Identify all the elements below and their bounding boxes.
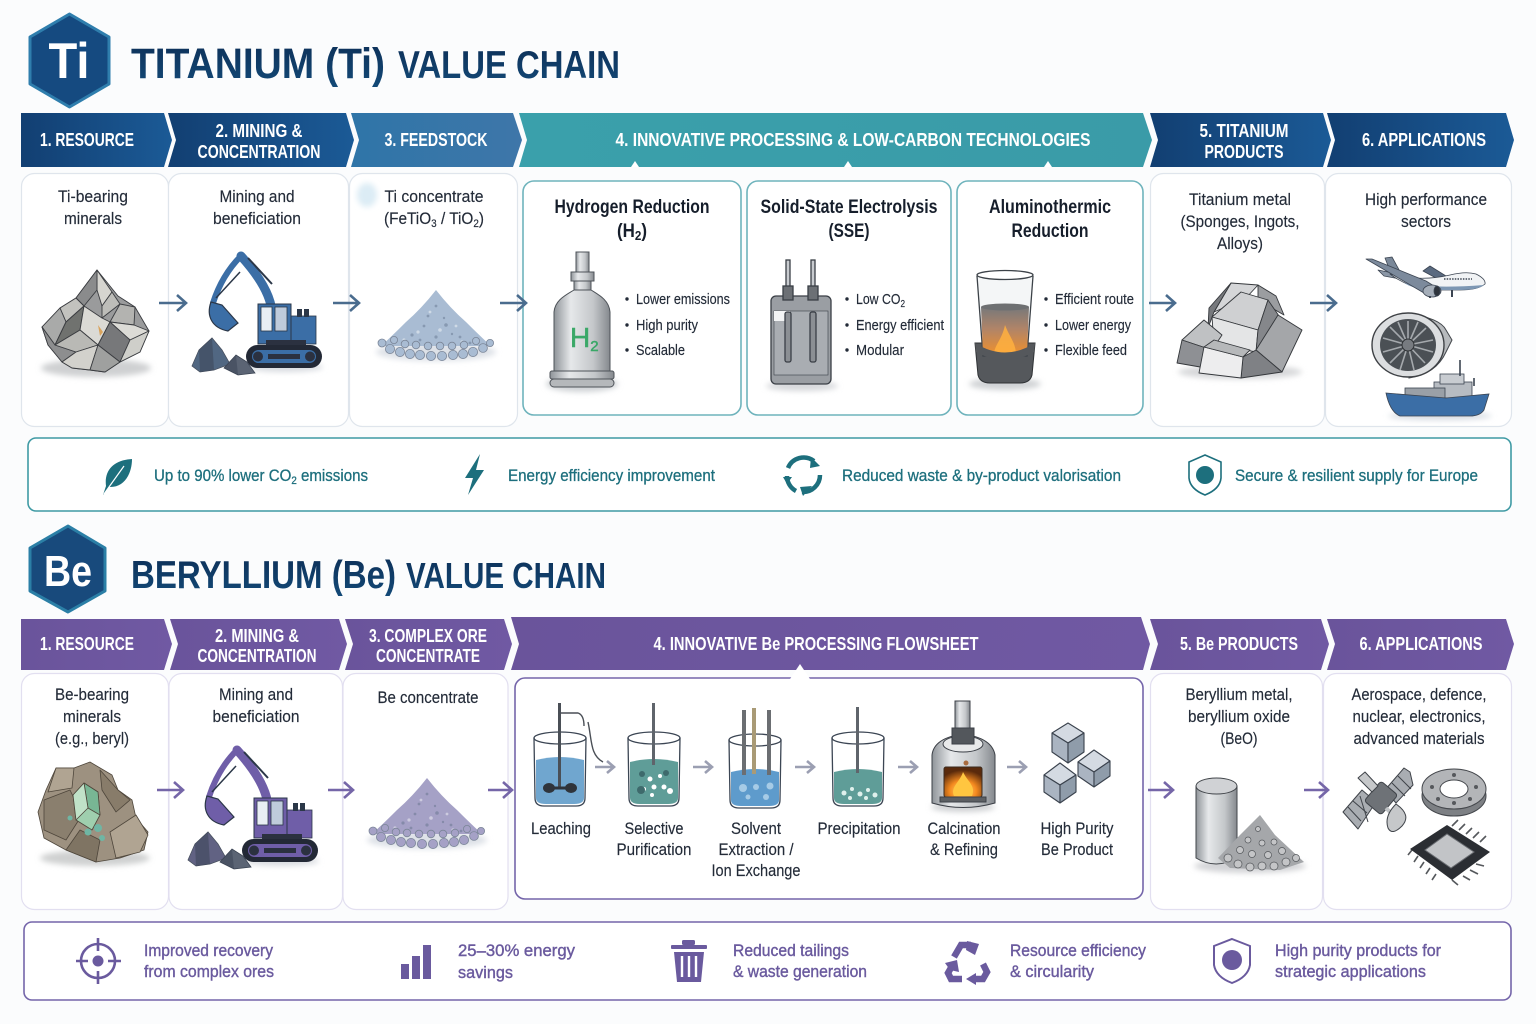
panel: Ti mining card: Mining and <box>220 187 294 206</box>
icon: titanium ingots <box>1177 283 1302 379</box>
icon: titanium concentrate pile <box>376 290 496 361</box>
list: aluminothermic benefits <box>1044 291 1134 359</box>
chevron: 3 feedstock: 3. FEEDSTOCK <box>384 130 488 150</box>
list: hydrogen benefits: Lower emissions <box>636 291 730 308</box>
icon: ship <box>1386 360 1492 420</box>
step: solvent extraction: Solvent <box>731 819 781 838</box>
panel: aluminothermic reduction: Reduction <box>1012 221 1088 242</box>
arrow: step 5 to 6 <box>1007 761 1026 773</box>
chevron: 4 flowsheet <box>511 617 1150 670</box>
icon: Ti hexagon badge: Ti <box>48 33 90 89</box>
list: aluminothermic benefits: Flexible feed <box>1055 342 1127 359</box>
panel: Be applications card: Aerospace, defence, <box>1352 685 1486 704</box>
panel: titanium products card: Alloys) <box>1217 234 1263 253</box>
icon: titanium mineral rock <box>41 270 151 377</box>
icon: hydrogen cylinder: 2 <box>590 338 599 355</box>
arrow: Ti feedstock to processing <box>500 295 526 311</box>
panel: solid-state electrolysis: (SSE) <box>828 221 870 242</box>
arrow: Ti processing to products <box>1149 295 1175 311</box>
panel: Be products card: (BeO) <box>1220 729 1258 748</box>
benefit: reduced waste: Reduced waste & by-product valorisation <box>842 466 1121 485</box>
step: solvent extraction: Extraction / <box>718 840 794 859</box>
icon: metal flange <box>1422 769 1486 816</box>
step: selective purification: Purification <box>616 840 692 859</box>
chevron: 6 applications: 6. APPLICATIONS <box>1360 634 1482 654</box>
panel: Ti feedstock card: (FeTiO <box>384 209 436 228</box>
icon: beryllium rod and powder <box>1194 778 1306 873</box>
icon: jet turbine <box>1372 313 1452 378</box>
chevron: 2 mining <box>168 113 354 167</box>
panel: titanium applications card <box>1326 174 1512 426</box>
chevron: 2 mining: CONCENTRATION <box>198 646 316 666</box>
step: leaching <box>531 703 603 838</box>
panel: Be resource card: minerals <box>63 707 121 726</box>
panel: Ti feedstock card <box>350 174 518 426</box>
panel: hydrogen reduction: ) <box>641 221 647 242</box>
panel: Be products card: Beryllium metal, <box>1186 685 1292 704</box>
panel: solid-state electrolysis: Solid-State Electrolysis <box>760 197 938 218</box>
benefit: energy savings: savings <box>458 963 513 982</box>
panel: aluminothermic reduction: Aluminothermic <box>989 197 1111 218</box>
chevron: 5 titanium products <box>1150 113 1331 167</box>
icon: blue excavator <box>192 256 323 375</box>
icon: beryl ore <box>38 762 150 866</box>
step: calcination and refining: & Refining <box>930 840 998 859</box>
chevron: 6 applications: 6. APPLICATIONS <box>1362 130 1486 150</box>
benefit: resource efficiency: & circularity <box>1010 962 1094 981</box>
panel: hydrogen reduction: (H <box>617 221 637 242</box>
icon: Be hexagon badge: Be <box>44 547 92 596</box>
step: leaching: Leaching <box>531 819 591 838</box>
list: hydrogen benefits: Scalable <box>636 342 685 359</box>
arrow: Be resource to mining <box>157 782 183 798</box>
title: titanium value chain <box>131 40 620 88</box>
icon: electrolysis cell <box>766 260 838 391</box>
arrow: Be flowsheet to products <box>1148 782 1173 798</box>
icon: beryllium concentrate pile <box>367 778 487 849</box>
step: calcination and refining <box>928 701 1000 859</box>
step: solvent extraction <box>712 708 800 880</box>
benefit: reduced tailings: & waste generation <box>733 962 867 981</box>
icon: hydrogen cylinder <box>546 252 618 392</box>
benefit: lower CO2 emissions: emissions <box>297 466 368 485</box>
step: selective purification <box>616 703 692 859</box>
panel: titanium applications card: High performance <box>1365 190 1487 209</box>
chevron: 3 complex ore: CONCENTRATE <box>376 646 480 666</box>
panel: Ti mining card <box>168 174 348 426</box>
benefit: improved recovery: Improved recovery <box>144 941 273 960</box>
icon: Ti hexagon badge <box>30 14 109 107</box>
panel: Be products card: beryllium oxide <box>1188 707 1290 726</box>
panel: Ti resource card <box>22 174 168 426</box>
panel: titanium products card: (Sponges, Ingots, <box>1180 212 1300 231</box>
chevron: 2 mining: 2. MINING & <box>216 121 302 141</box>
chevron: 2 mining: CONCENTRATION <box>198 142 320 162</box>
benefit: high purity: High purity products for <box>1275 941 1441 960</box>
title: beryllium value chain: VALUE CHAIN <box>406 555 606 596</box>
benefit: energy efficiency: Energy efficiency improvement <box>508 466 715 485</box>
title: titanium value chain: TITANIUM (Ti) <box>131 40 385 88</box>
step: precipitation: Precipitation <box>818 819 900 838</box>
panel: Be resource card: (e.g., beryl) <box>55 729 129 748</box>
list: electrolysis benefits: 2 <box>900 299 905 310</box>
arrow: Be products to applications <box>1304 782 1328 798</box>
title: beryllium value chain <box>131 554 606 597</box>
benefit: energy savings: 25–30% energy <box>458 941 575 960</box>
panel: hydrogen reduction <box>523 181 741 415</box>
benefit: reduced waste <box>783 457 1121 496</box>
icon: Be hexagon badge <box>30 526 105 612</box>
list: electrolysis benefits: Modular <box>856 342 904 359</box>
benefit: lower CO2 emissions: 2 <box>291 475 297 487</box>
panel: Ti feedstock card: Ti concentrate <box>384 187 484 206</box>
title: beryllium value chain: BERYLLIUM (Be) <box>131 554 396 597</box>
panel: titanium products card <box>1150 174 1324 426</box>
icon: purple excavator <box>188 750 319 869</box>
panel: Ti mining card: beneficiation <box>213 209 301 228</box>
list: electrolysis benefits: Energy efficient <box>856 317 945 334</box>
panel: Be concentrate card <box>343 674 508 910</box>
benefit: lower CO2 emissions <box>103 459 368 495</box>
list: aluminothermic benefits: Efficient route <box>1055 291 1134 308</box>
chevron: 5 be products: 5. Be PRODUCTS <box>1180 634 1298 654</box>
chevron: 3 complex ore <box>345 619 512 670</box>
panel: Be benefits bar <box>24 922 1511 1000</box>
panel: hydrogen reduction: Hydrogen Reduction <box>554 197 710 218</box>
benefit: reduced tailings <box>671 940 867 982</box>
list: hydrogen benefits <box>625 291 730 359</box>
arrow: Ti resource to mining <box>159 295 186 311</box>
panel: Be concentrate card: Be concentrate <box>378 688 478 707</box>
panel: Ti resource card: Ti-bearing <box>58 187 128 206</box>
panel: Be applications card: nuclear, electronics, <box>1352 707 1486 726</box>
step: selective purification: Selective <box>624 819 684 838</box>
panel: Ti resource card: minerals <box>64 209 122 228</box>
step: calcination and refining: Calcination <box>928 819 1000 838</box>
benefit: improved recovery <box>76 938 274 984</box>
chevron: 1 resource <box>21 619 172 670</box>
panel: Be processing flowsheet <box>515 664 1143 899</box>
chevron: 4 flowsheet: 4. INNOVATIVE Be PROCESSING FLOWSHEET <box>654 634 978 654</box>
section: titanium header <box>30 14 620 107</box>
step: high purity be product <box>1040 723 1114 859</box>
section: beryllium header <box>30 526 606 612</box>
chevron: 6 applications <box>1327 113 1514 167</box>
chevron: 4 innovative processing <box>519 113 1152 167</box>
panel: Ti feedstock card: / TiO <box>437 209 473 228</box>
panel: Ti feedstock card: 2 <box>473 218 479 230</box>
chevron: 3 feedstock <box>351 113 522 167</box>
chevron: 3 complex ore: 3. COMPLEX ORE <box>369 626 487 646</box>
panel: Ti feedstock card: ) <box>479 209 484 228</box>
panel: Be mining card <box>169 674 342 910</box>
chevron: 2 mining: 2. MINING & <box>215 626 299 646</box>
panel: aluminothermic reduction <box>957 181 1143 415</box>
icon: hydrogen cylinder: H <box>570 322 590 353</box>
icon: airplane <box>1366 257 1485 298</box>
panel: Be applications card: advanced materials <box>1354 729 1484 748</box>
panel: hydrogen reduction: 2 <box>635 228 641 243</box>
step: high purity be product: Be Product <box>1041 840 1113 859</box>
panel: Ti feedstock card: 3 <box>431 218 437 230</box>
step: precipitation <box>818 707 900 838</box>
benefit: resource efficiency: Resource efficiency <box>1010 941 1146 960</box>
chevron: 4 innovative processing: 4. INNOVATIVE PROCESSING & LOW-CARBON TECHNOLOGIES <box>616 130 1090 150</box>
list: hydrogen benefits: High purity <box>636 317 698 334</box>
panel: Be mining card: beneficiation <box>212 707 300 726</box>
icon: crucible with melt <box>969 270 1041 390</box>
section: titanium stage chevrons <box>21 113 1514 167</box>
chevron: 2 mining <box>170 619 347 670</box>
panel: titanium products card: Titanium metal <box>1189 190 1291 209</box>
benefit: secure supply: Secure & resilient supply for Europe <box>1235 466 1478 485</box>
panel: Be resource card: Be-bearing <box>55 685 129 704</box>
arrow: step 1 to 2 <box>595 761 614 773</box>
arrow: Be concentrate to flowsheet <box>488 782 512 798</box>
step: high purity be product: High Purity <box>1040 819 1114 838</box>
benefit: improved recovery: from complex ores <box>144 962 274 981</box>
chevron: 5 titanium products: PRODUCTS <box>1204 142 1284 162</box>
chevron: 1 resource: 1. RESOURCE <box>40 130 134 150</box>
title: titanium value chain: VALUE CHAIN <box>398 44 620 87</box>
panel: Ti benefits bar <box>28 438 1511 511</box>
panel: Be applications card <box>1324 674 1512 910</box>
benefit: high purity: strategic applications <box>1275 962 1426 981</box>
benefit: reduced tailings: Reduced tailings <box>733 941 849 960</box>
chevron: 1 resource: 1. RESOURCE <box>40 634 134 654</box>
icon: microchip <box>1408 820 1490 885</box>
arrow: step 2 to 3 <box>693 761 712 773</box>
chevron: 1 resource <box>21 113 172 167</box>
panel: Be mining card: Mining and <box>219 685 293 704</box>
icon: satellite <box>1343 768 1413 832</box>
panel: solid-state electrolysis <box>747 181 951 415</box>
benefit: high purity <box>1214 939 1441 983</box>
list: electrolysis benefits: Low CO <box>856 291 910 308</box>
chevron: 5 titanium products: 5. TITANIUM <box>1200 121 1288 141</box>
panel: Be resource card <box>22 674 168 910</box>
step: solvent extraction: Ion Exchange <box>712 861 800 880</box>
benefit: energy savings <box>401 941 575 982</box>
arrow: Ti mining to feedstock <box>333 295 359 311</box>
benefit: secure supply <box>1189 455 1478 495</box>
panel: titanium applications card: sectors <box>1401 212 1451 231</box>
arrow: step 3 to 4 <box>795 761 814 773</box>
panel: Be products card <box>1150 674 1322 910</box>
arrow: Ti products to applications <box>1310 295 1336 311</box>
chevron: 6 applications <box>1327 619 1514 670</box>
benefit: resource efficiency <box>945 941 1146 985</box>
arrow: step 4 to 5 <box>898 761 917 773</box>
arrow: Be mining to concentrate <box>328 782 353 798</box>
chevron: 5 be products <box>1150 619 1329 670</box>
list: aluminothermic benefits: Lower energy <box>1055 317 1131 334</box>
list: electrolysis benefits <box>845 291 945 359</box>
section: beryllium stage chevrons <box>21 617 1514 670</box>
benefit: energy efficiency <box>465 454 715 495</box>
benefit: lower CO2 emissions: Up to 90% lower CO <box>154 466 309 485</box>
